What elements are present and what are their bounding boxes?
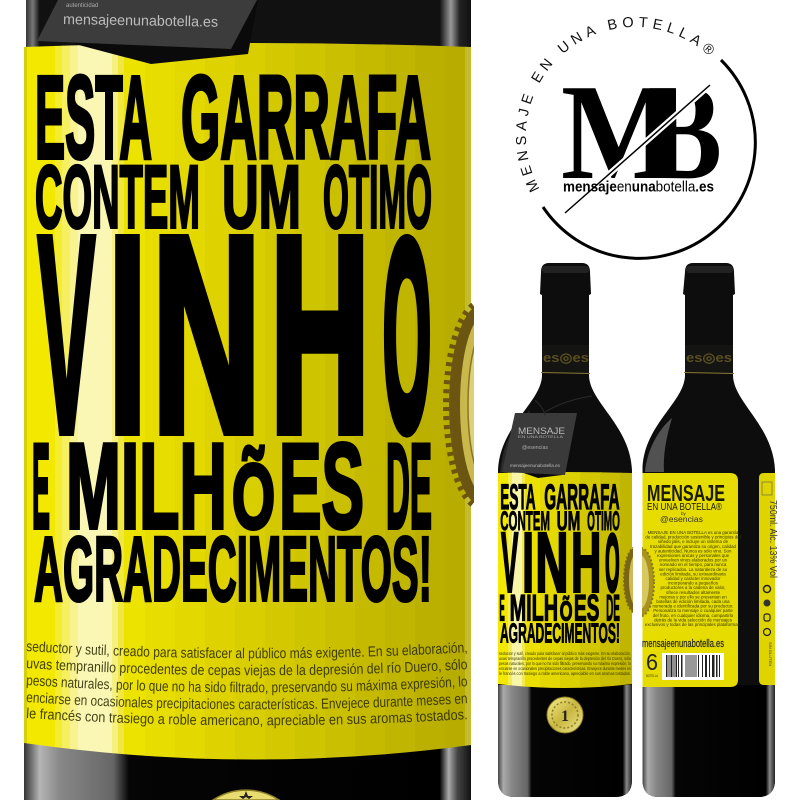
line: CONTEM UM OTIMO: UM [222,146,301,246]
mini paragraph: uvas tempranillo procedentes de cepas viejas de la depresión del río Duero, sólo [499,656,632,661]
mini headline: N [536,515,568,609]
large bottle: DE [386,418,432,554]
lower glass shading [642,685,775,797]
small bottle: front: O [605,518,620,608]
logo circular text: MENSAJE EN UNA BOTELLA® [516,17,714,192]
back label paragraph: ser replicados. La naturaleza de su [659,567,728,572]
age number: 6 [646,649,658,675]
hanging tag: MENSAJE [518,426,565,436]
barcode [662,653,724,680]
small bottle: front: AGRADECIMENTOS! [500,617,620,648]
mini headline: I [522,515,534,609]
line: VINHO: N [152,179,261,491]
age number: BOTELLA [646,673,658,678]
back label paragraph: edición limitada, su extraordinaria [660,571,726,576]
line: E MILHOES DE: E [32,418,50,554]
headline message [32,52,432,620]
capsule band [541,345,590,374]
back label paragraph: y autenticidad. Nunca es sólo vino. Son [655,548,732,553]
back label paragraph: productores a la cadena de valor, [661,585,725,590]
line: E MILHOES DE: ES [279,418,364,554]
mini paragraph: le francés con trasiego a roble americano, apreciable en sus aromas tostados. [499,671,631,676]
mini paragraph: enciarse en ocasionales precipitaciones características. Envejece durante meses en [499,666,632,671]
back label heading: MENSAJE [647,480,725,506]
back label paragraph: incorporando a pequeños [668,581,719,586]
back label paragraph: detrás de la vida selección de mensajes [654,617,733,622]
back label paragraph: MENSAJE EN UNA BOTELLA es una garantía [648,530,739,535]
wine description paragraph: pesos naturales, por lo que no ha sido filtrado, preservando su máxima expresión, lo [26,676,467,696]
medal on back [642,547,655,617]
back label heading: EN UNA BOTELLA® [647,502,723,513]
back label paragraph: envuelven vinos elaborados por un [659,558,728,563]
back label paragraph: noneado en el tiempo, para nunca [660,562,727,567]
line: VINHO: H [270,179,370,491]
mini headline: ESTA [500,477,536,517]
mini headline: CONTEM [500,506,550,536]
back label paragraph: mejoras y por ello se presentan en [659,594,727,599]
capsule top edge [542,266,589,273]
bottle glass upper [26,0,471,60]
logo ring [543,60,755,258]
logo monogram: M [561,56,679,208]
capsule band: es◎es [686,350,732,365]
back label paragraph: botellas de edición limitada, cada una [656,599,730,604]
wine description paragraph: seductor y sutil, creado para satisfacer al público más exigente. En su elaboración, [26,642,467,662]
back label paragraph: calidad y carácter innovador [666,576,721,581]
side medal [623,546,633,614]
line: E MILHOES DE: MILH [66,418,227,554]
mini headline: ES [574,588,599,629]
capsule band [684,345,734,374]
wine description paragraph [26,642,467,728]
wine description paragraph: enciarse en ocasionales precipitaciones características. Envejece durante meses en [26,692,467,712]
small bottle: front: DE [606,588,620,629]
mini headline: UM [557,506,580,536]
back label heading: @esencias [660,515,703,524]
gold medal [547,697,583,733]
back label paragraph: viñedo jalis, e incluye un sistema de [658,539,729,544]
line: VINHO [38,179,431,491]
side medal seal [443,302,474,506]
side label: SIN GLUTEN [768,642,773,666]
mini paragraph [499,651,632,676]
large bottle: O [383,185,431,485]
bottle silhouette [498,263,632,797]
back label paragraph: del fruto, en cualquier idioma, compartirlo [653,613,734,618]
back label heading [647,480,725,524]
mini headline: E [499,588,505,629]
hanging tag: mensajeenunabotella.es [510,463,561,468]
yellow front label [24,38,471,778]
small bottle: back [628,263,778,797]
mini headline [499,477,620,648]
back label paragraph [645,530,741,627]
hanging tag [502,396,592,478]
capsule band: es◎es [543,350,589,365]
back label paragraph: exclusivos y todas de las principales plataformas. [645,622,741,627]
back label url: mensajeenunabotella.es [642,638,724,650]
hanging tag: mensajeenunabotella.es [63,12,218,31]
small bottle: front: OTIMO [587,506,620,536]
hanging tag: autenticidad [66,3,98,9]
logo monogram: B [648,56,722,208]
back label paragraph: trazabilidad que garantiza su origen, calidad [650,544,737,549]
small bottle: front [498,263,648,797]
back label paragraph: de calidad, producción sostenible y principios del [645,535,741,540]
wine description paragraph: le francés con trasiego a roble americano, apreciable en sus aromas tostados. [26,708,467,728]
mini headline: H [571,515,601,609]
hanging tag: @esencias [522,445,549,451]
large bottle [24,0,474,800]
mini paragraph: pesos naturales, por lo que no ha sido filtrado, preservando su máxima expresión, lo [499,661,632,666]
gold medal: 1 [561,708,569,725]
back label paragraph: Personaliza tu mensaje o cualquier parte [653,608,733,613]
back label heading: by [681,511,687,516]
shoulder highlight [500,410,530,472]
mini headline: Õ [560,596,573,627]
back label paragraph: numerada e identificada por su productor. [652,604,734,609]
bottle glass lower [24,735,471,800]
shoulder highlight [645,418,672,472]
line: VINHO: V [38,179,95,491]
capsule top edge [686,266,733,273]
mini headline: V [501,515,518,609]
hanging tag [37,0,258,64]
lower glass shading [498,685,632,797]
label [498,470,632,695]
line: E MILHOES DE: Õ [232,445,275,548]
back label paragraph: ofrece resultados altamente [666,590,721,595]
mini headline: MILH [510,588,558,629]
side label: 750ml. Alc. 13% Vol [767,500,778,578]
side label [759,473,778,685]
mini paragraph: seductor y sutil, creado para satisfacer al público más exigente. En su elaboración, [499,651,631,656]
logo: Mensaje en una botella [516,17,757,260]
line: VINHO: I [108,179,146,491]
large bottle: GARRAFA [181,52,431,184]
back label [642,473,738,687]
line: ESTA GARRAFA: ESTA [35,52,152,184]
small bottle: front: GARRAFA [544,477,620,517]
wine description paragraph: uvas tempranillo procedentes de cepas viejas de la depresión del río Duero, sólo [26,659,467,678]
logo url: mensajeenunabotella.es [563,178,714,196]
gold medal on base [213,790,279,800]
large bottle: OTIMO [323,146,432,246]
line: CONTEM UM OTIMO: CONTEM [35,146,200,246]
back label paragraph: expresiones únicas y personales que [657,553,730,558]
bottle silhouette [642,263,775,797]
hanging tag: EN UNA BOTELLA [518,434,563,439]
